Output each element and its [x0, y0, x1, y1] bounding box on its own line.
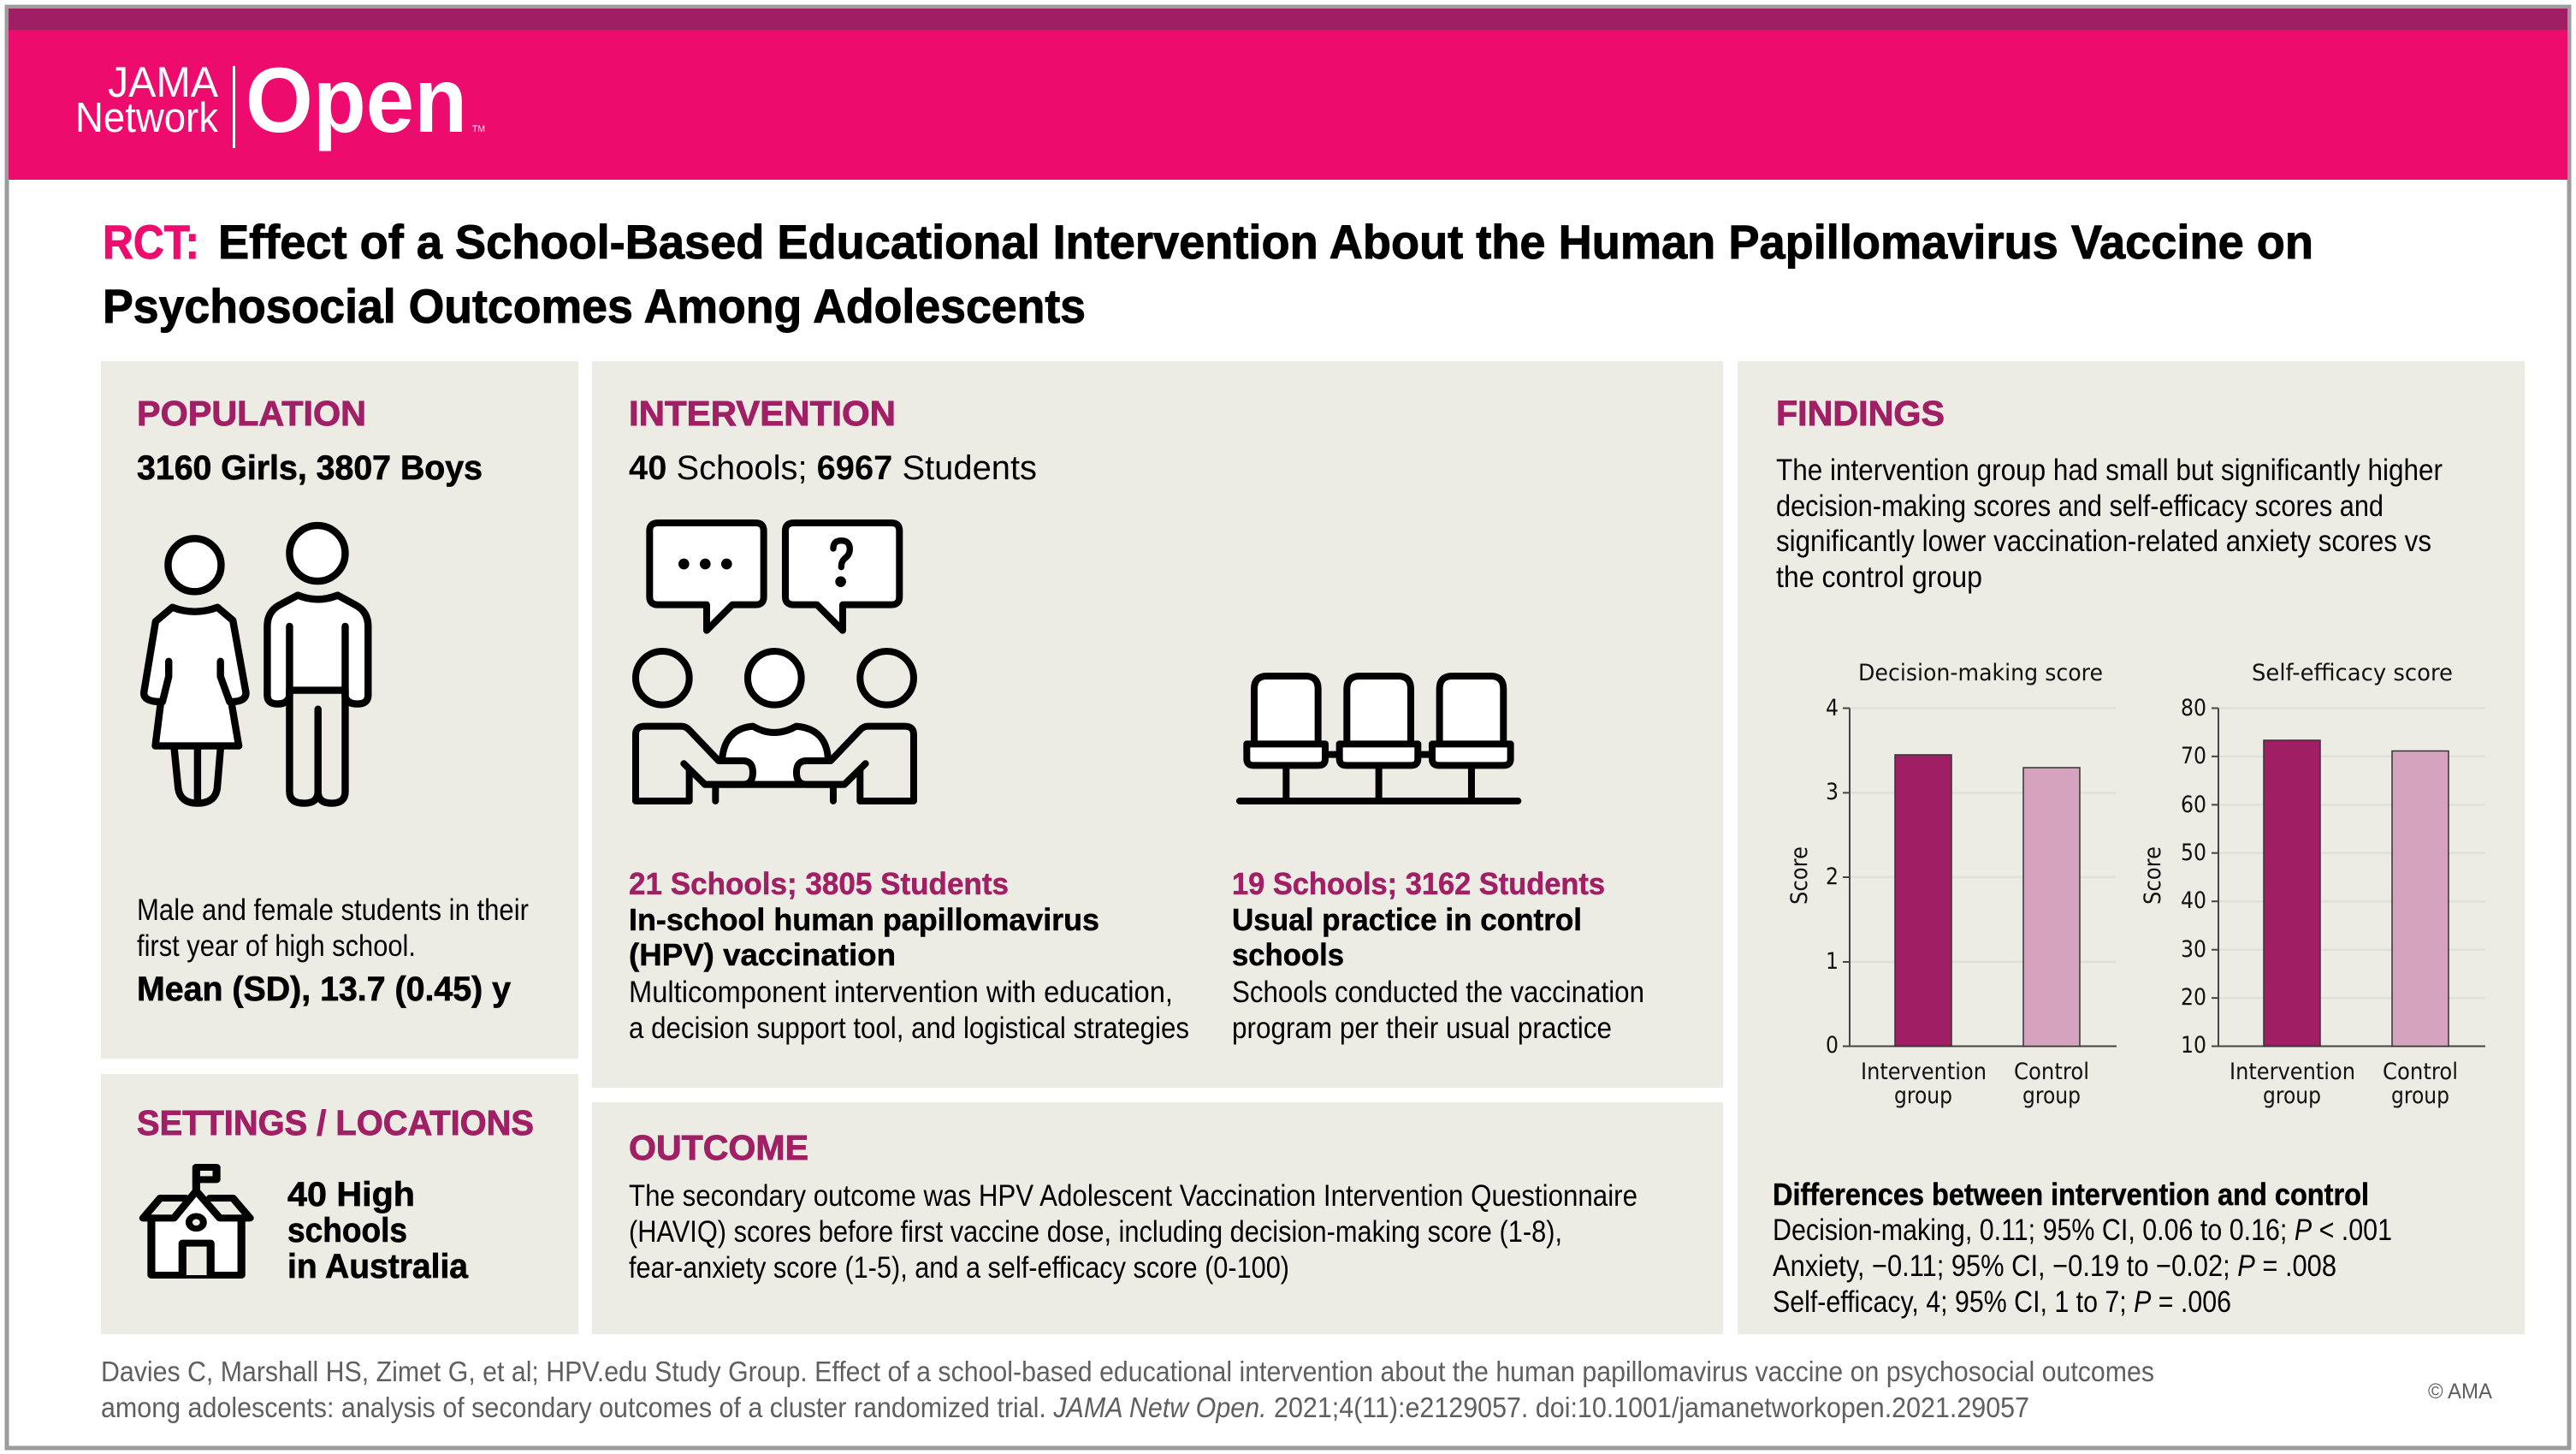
heading: settings / locations: SETTINGS / LOCATIONS	[137, 1103, 534, 1142]
bar chart: self-efficacy score: 70	[2181, 743, 2206, 769]
bar chart: decision-making score	[1786, 660, 2117, 1109]
panel: intervention	[592, 361, 1723, 1088]
bar chart: self-efficacy score	[2140, 660, 2485, 1109]
icon: group discussion	[636, 523, 914, 801]
title	[103, 215, 2313, 333]
bar chart: self-efficacy score: 40	[2181, 887, 2206, 914]
bar chart: self-efficacy score: Score	[2140, 846, 2166, 905]
icon: waiting room seats	[1240, 676, 1518, 801]
header band	[9, 9, 2567, 180]
bar chart: self-efficacy score: Intervention	[2230, 1059, 2355, 1085]
intervention arm text: Multicomponent intervention with education,	[629, 976, 1173, 1009]
control arm text: schools	[1232, 937, 1344, 972]
bar chart: decision-making score: Decision-making score	[1858, 660, 2103, 686]
heading: intervention: INTERVENTION	[629, 394, 896, 433]
bar chart: self-efficacy score: group	[2263, 1083, 2321, 1109]
bar chart: decision-making score: Intervention	[1861, 1059, 1987, 1085]
bar chart: self-efficacy score: 20	[2181, 984, 2206, 1011]
bar chart: self-efficacy score: 10	[2181, 1032, 2206, 1059]
logo: JAMA Network Open: Network	[75, 95, 218, 141]
population description: Mean (SD), 13.7 (0.45) y	[137, 970, 512, 1008]
citation	[101, 1356, 2154, 1423]
panel: outcome	[592, 1102, 1723, 1334]
panel: settings / locations	[101, 1074, 578, 1334]
findings summary	[1776, 454, 2443, 594]
intervention arm text: (HPV) vaccination	[629, 937, 896, 972]
intervention arm text: In-school human papillomavirus	[629, 902, 1099, 937]
heading: findings: FINDINGS	[1776, 394, 1945, 433]
control arm text: 19 Schools; 3162 Students	[1232, 866, 1605, 901]
bar chart: self-efficacy score: 30	[2181, 936, 2206, 963]
differences between groups: Decision-making, 0.11; 95% CI, 0.06 to 0.16; P < .001	[1773, 1214, 2392, 1247]
intervention arm text: a decision support tool, and logistical strategies	[629, 1012, 1189, 1045]
logo: JAMA Network Open: TM	[472, 124, 485, 134]
intervention totals: 40 Schools; 6967 Students	[629, 449, 1037, 487]
population description: Male and female students in their	[137, 893, 529, 927]
differences between groups	[1773, 1177, 2392, 1319]
citation: among adolescents: analysis of secondary outcomes of a cluster randomized trial. JAMA Netw Open. 2021;4(11):e2129057. doi:10.1001/jamanetworkopen.2021.29057	[101, 1392, 2029, 1423]
copyright: © AMA	[2428, 1380, 2492, 1404]
logo: JAMA Network Open: Open	[246, 48, 467, 151]
panel: population	[101, 361, 578, 1059]
bar chart: decision-making score: 3	[1826, 779, 1839, 805]
bar chart: decision-making score: 4	[1826, 695, 1839, 721]
control arm text: Usual practice in control	[1232, 902, 1582, 937]
differences between groups: Differences between intervention and control	[1773, 1177, 2369, 1212]
title: Effect of a School-Based Educational Intervention About the Human Papillomavirus Vaccine on	[218, 215, 2313, 269]
control arm text: program per their usual practice	[1232, 1012, 1612, 1045]
outcome text	[629, 1179, 1637, 1285]
bar chart: decision-making score: 0	[1826, 1032, 1839, 1059]
outcome text: (HAVIQ) scores before first vaccine dose, including decision-making score (1-8),	[629, 1215, 1562, 1249]
findings summary: decision-making scores and self-efficacy scores and	[1776, 490, 2384, 523]
logo: JAMA Network Open	[75, 48, 485, 151]
population count: 3160 Girls, 3807 Boys	[137, 449, 483, 487]
findings summary: significantly lower vaccination-related anxiety scores vs	[1776, 525, 2431, 558]
panel: findings	[1738, 361, 2525, 1334]
bar chart: self-efficacy score: 80	[2181, 695, 2206, 721]
findings summary: the control group	[1776, 561, 1982, 594]
settings text: 40 High	[287, 1176, 415, 1214]
outcome text: The secondary outcome was HPV Adolescent Vaccination Intervention Questionnaire	[629, 1179, 1637, 1213]
bar chart: self-efficacy score: Self-efficacy score	[2252, 660, 2453, 686]
icon: school	[143, 1167, 250, 1275]
heading: population: POPULATION	[137, 394, 366, 433]
title: RCT:	[103, 215, 199, 269]
bar chart: decision-making score: Control	[2014, 1059, 2089, 1085]
settings text: in Australia	[287, 1248, 469, 1285]
citation: Davies C, Marshall HS, Zimet G, et al; HPV.edu Study Group. Effect of a school-based educational intervention about the human papillomavirus vaccine on psychosocial outcomes	[101, 1356, 2154, 1387]
population description	[137, 893, 529, 1008]
icon: girl and boy	[144, 525, 368, 804]
population description: first year of high school.	[137, 929, 416, 963]
title: Psychosocial Outcomes Among Adolescents	[103, 279, 1086, 333]
bar chart: self-efficacy score: 50	[2181, 840, 2206, 866]
settings text	[287, 1176, 469, 1285]
differences between groups: Self-efficacy, 4; 95% CI, 1 to 7; P = .006	[1773, 1285, 2231, 1319]
bar chart: self-efficacy score: group	[2391, 1083, 2449, 1109]
logo: JAMA Network Open: JAMA	[108, 58, 219, 106]
bar chart: self-efficacy score: Control	[2383, 1059, 2458, 1085]
control arm text	[1232, 866, 1644, 1045]
heading: outcome: OUTCOME	[629, 1128, 808, 1167]
bar chart: decision-making score: group	[2022, 1083, 2081, 1109]
control arm text: Schools conducted the vaccination	[1232, 976, 1644, 1009]
bar chart: decision-making score: group	[1894, 1083, 1952, 1109]
findings summary: The intervention group had small but significantly higher	[1776, 454, 2443, 487]
bar chart: self-efficacy score: 60	[2181, 792, 2206, 818]
bar chart: decision-making score: 2	[1826, 863, 1839, 890]
intervention arm text: 21 Schools; 3805 Students	[629, 866, 1009, 901]
bar chart: decision-making score: 1	[1826, 948, 1839, 975]
intervention arm text	[629, 866, 1189, 1045]
settings text: schools	[287, 1212, 407, 1249]
bar chart: decision-making score: Score	[1786, 846, 1813, 905]
differences between groups: Anxiety, −0.11; 95% CI, −0.19 to −0.02; P = .008	[1773, 1249, 2336, 1283]
outcome text: fear-anxiety score (1-5), and a self-efficacy score (0-100)	[629, 1251, 1289, 1285]
